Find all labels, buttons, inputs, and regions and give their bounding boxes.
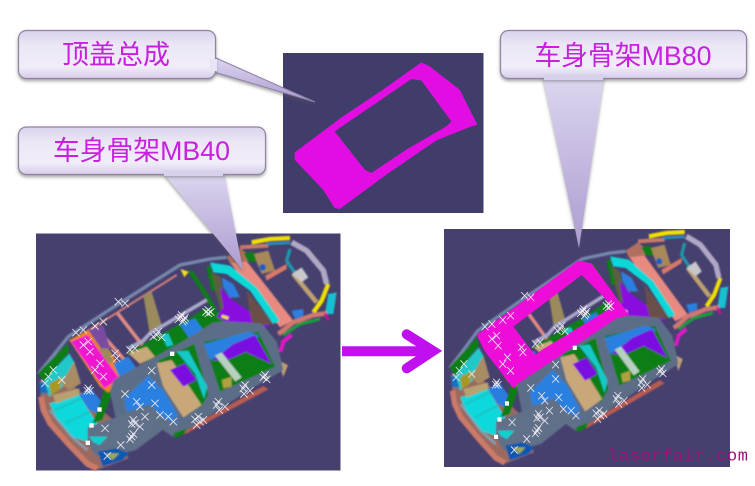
callout: roof assembly [18,30,315,102]
panel: roof assembly image [283,53,484,213]
callout: MB40 [18,127,266,270]
watermark: laserfair.com [608,448,748,466]
arrow: MB40 to MB80 [342,334,433,368]
panel: body frame MB80 image [444,229,730,467]
magenta roof on MB80 [477,261,629,388]
car body MB80 [449,232,728,463]
label: MB80: 车身骨架MB80 [534,41,712,71]
label: MB40: 车身骨架MB40 [53,136,230,166]
panel: body frame MB40 image [36,234,340,470]
car body MB40 [38,238,337,469]
callout: MB80 [500,30,746,248]
label: roof assembly: 顶盖总成 [62,40,170,70]
roof panel shape [295,62,477,209]
